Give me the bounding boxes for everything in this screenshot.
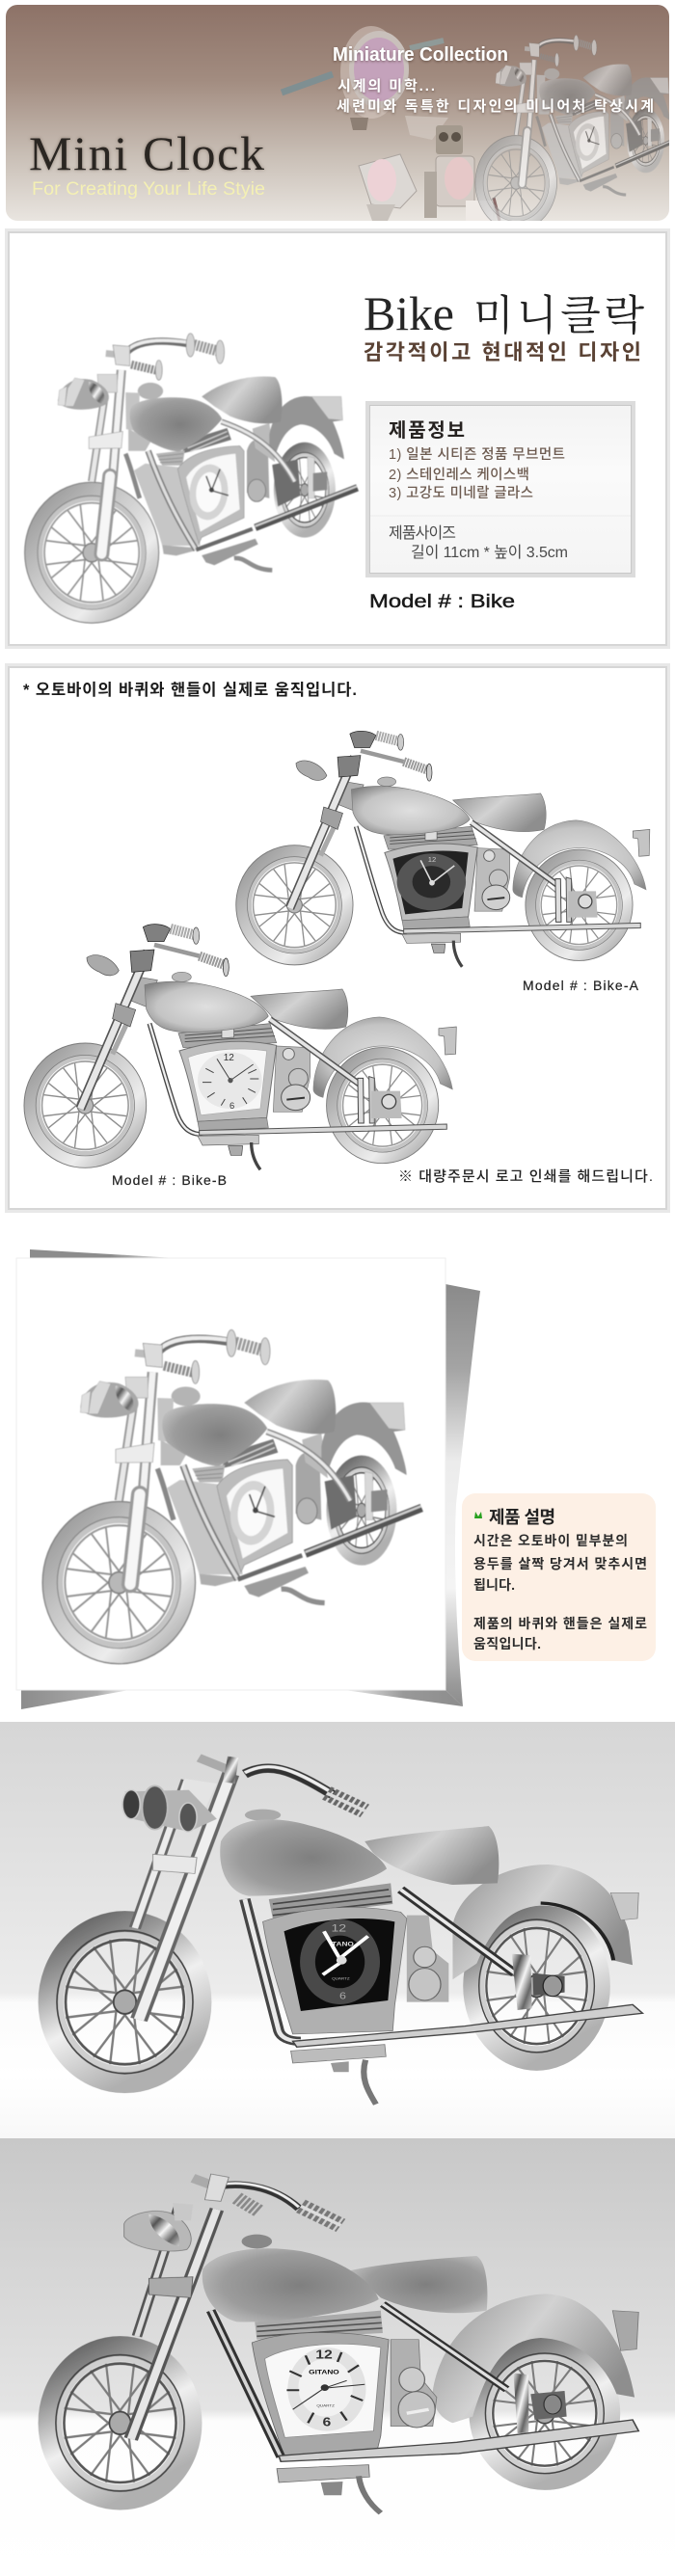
callout text: 용두를 살짝 당겨서 맞추시면 [473,1556,647,1571]
info list: 2) 스테인레스 케이스백 [389,467,529,483]
photo: bike with black dial: TANO [332,1940,354,1947]
rear wheel [478,2346,611,2482]
handlebar [209,2185,299,2209]
photo: bike with black dial: 12 [331,1921,346,1934]
headlights [181,1779,217,1810]
engine [269,1883,392,1919]
callout text [473,1533,647,1651]
paper shadow [21,1249,480,1709]
panel note: * 오토바이의 바퀴와 핸들이 실제로 움직입니다. [23,681,357,699]
bike A label: Model # : Bike-A [523,978,639,993]
callout text: 시간은 오토바이 밑부분의 [473,1533,628,1548]
photo: bike with white dial: 12 [315,2348,333,2362]
bike B white clock face: 6 [230,1101,234,1111]
front wheel [47,2347,193,2500]
bike B white clock face [188,1049,267,1115]
panel: product intro [5,228,670,649]
info heading: 제품정보 [389,419,465,442]
three-quarter view bike [25,334,358,623]
handlebar [245,1768,333,1795]
rear fender [452,1865,633,1979]
photo: bike with white dial: GITANO [309,2368,339,2375]
frame pipes [245,1899,301,2041]
front wheel [48,1921,202,2082]
panel: moving parts models [5,663,670,1213]
photo: bike with white dial: 6 [322,2416,331,2429]
bike B [24,925,456,1169]
size info [389,524,568,561]
seat [364,1826,499,1885]
footboard and kickstand [277,2465,369,2482]
banner copy line 1: 시계의 미학... [338,78,435,94]
bike A [236,731,650,967]
rear wheel [472,1911,602,2061]
headlights [124,2211,191,2251]
callout text: 제품의 바퀴와 핸들은 실제로 [473,1616,647,1631]
logo printing note: ※ 대량주문시 로고 인쇄를 해드립니다. [398,1168,653,1185]
photo: bike with black dial [0,1722,675,2138]
product title: Bike [364,286,454,340]
size info: 제품사이즈 [389,524,456,542]
tank [242,2235,272,2248]
clock case [252,2333,389,2456]
panel: paper with product description [16,1249,656,1709]
photo: bike with black dial: 6 [339,1991,346,2001]
rear fender [433,2294,634,2423]
product subtitle: 감각적이고 현대적인 디자인 [364,340,641,364]
callout: product description [462,1493,656,1661]
bike B white clock face: 12 [224,1053,234,1063]
icon: green arrow [474,1512,482,1518]
banner [6,5,675,230]
photo: bike with white dial: QUARTZ [316,2403,335,2408]
banner copy line 2: 세련미와 독특한 디자인의 미니어처 탁상시계 [337,98,654,115]
product title: 미니클락 [473,293,644,339]
exhaust [279,2420,638,2461]
callout text: 움직입니다. [473,1636,541,1651]
banner clock collage [282,26,675,230]
frame pipes [211,2311,281,2456]
bike A black clock face: 12 [428,855,436,864]
bike A black clock face [392,850,469,914]
model label: Model # : Bike [369,592,515,612]
engine [255,2311,383,2340]
fork [135,1781,187,1928]
photo: bike with black dial: QUARTZ [332,1976,350,1980]
banner tagline: For Creating Your Life Styie [32,179,265,200]
info list [389,446,565,501]
info list: 3) 고강도 미네랄 글라스 [389,485,533,501]
clock case [263,1907,407,2034]
exhaust [293,2004,642,2047]
banner heading: Mini Clock: Mini Clock [29,126,264,180]
seat [351,2256,487,2313]
tank [245,1810,281,1821]
banner collection title: Miniature Collection [333,44,508,66]
footboard and kickstand [291,2045,386,2063]
product title [364,286,644,340]
fork [137,2206,178,2336]
info list: 1) 일본 시티즌 정품 무브먼트 [389,446,565,463]
bike B label: Model # : Bike-B [112,1172,227,1188]
callout heading: 제품 설명 [489,1508,555,1527]
info box [367,403,634,576]
photo: bike with white dial [0,2138,675,2576]
size info: 길이 11cm * 높이 3.5cm [411,544,568,561]
three-quarter view bike [42,1329,421,1664]
callout text: 됩니다. [473,1577,515,1593]
